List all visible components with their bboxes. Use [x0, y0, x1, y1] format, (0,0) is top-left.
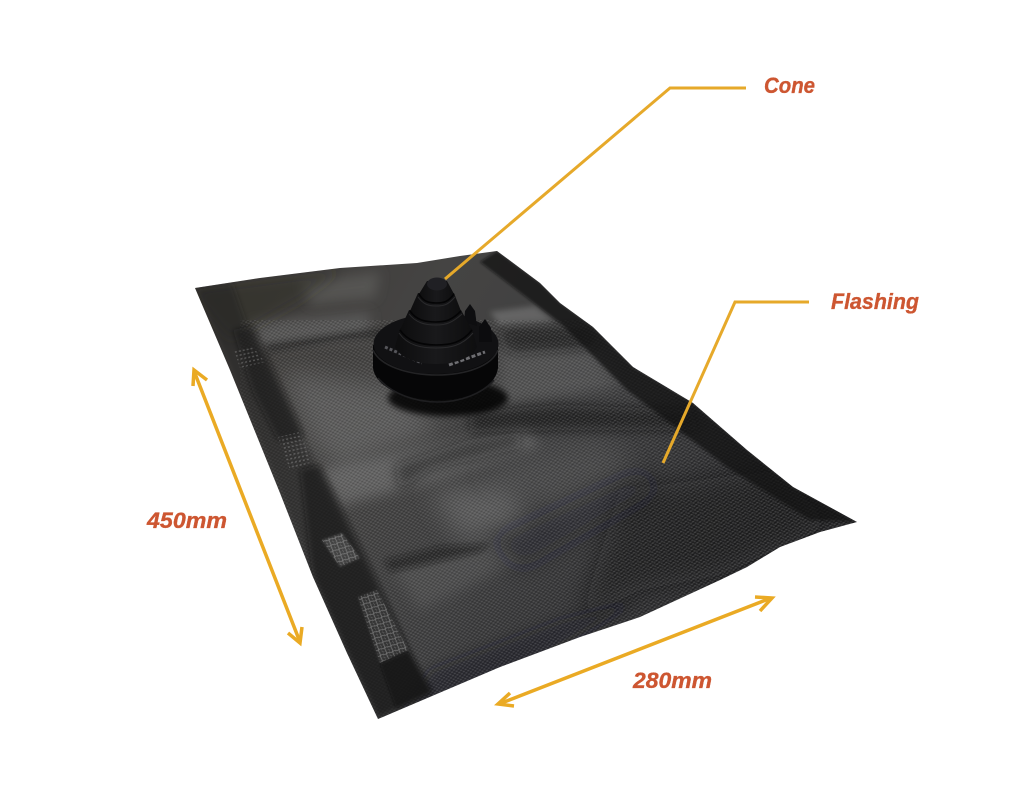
tier grooves — [400, 294, 472, 345]
cone cap — [427, 278, 447, 290]
honeycomb patch 1 — [322, 533, 360, 567]
texture — [240, 320, 880, 720]
label: 450mm: 450mm — [146, 508, 227, 533]
tier highlights — [399, 297, 473, 348]
right border band — [480, 251, 857, 522]
light folds — [250, 312, 370, 350]
left border band — [195, 284, 432, 719]
tier 1 — [419, 281, 454, 303]
arrow: 280mm — [498, 597, 772, 706]
label: flashing: Flashing — [831, 289, 919, 314]
label: cone: Cone — [764, 73, 815, 98]
side bolts — [464, 304, 477, 326]
honeycomb patch 2 — [358, 590, 408, 663]
dotted patches — [234, 347, 265, 368]
tier 2 — [410, 293, 461, 322]
tier 4 — [395, 328, 477, 364]
arrow: 450mm — [193, 370, 302, 643]
cone — [373, 278, 498, 402]
dark creases — [264, 326, 386, 354]
leader line: flashing — [663, 302, 809, 463]
cone base shadow — [388, 380, 508, 416]
leader line: cone — [445, 88, 746, 279]
tier 3 — [400, 310, 472, 345]
dark corner block — [380, 652, 431, 708]
flange lettering — [385, 347, 422, 363]
infographic: flashing product diagram — [146, 77, 919, 719]
base side wall — [373, 345, 498, 400]
flashing sheet — [190, 251, 880, 720]
base top flange — [374, 314, 498, 374]
label: 280mm: 280mm — [632, 668, 712, 693]
base bottom ridge — [378, 378, 494, 402]
